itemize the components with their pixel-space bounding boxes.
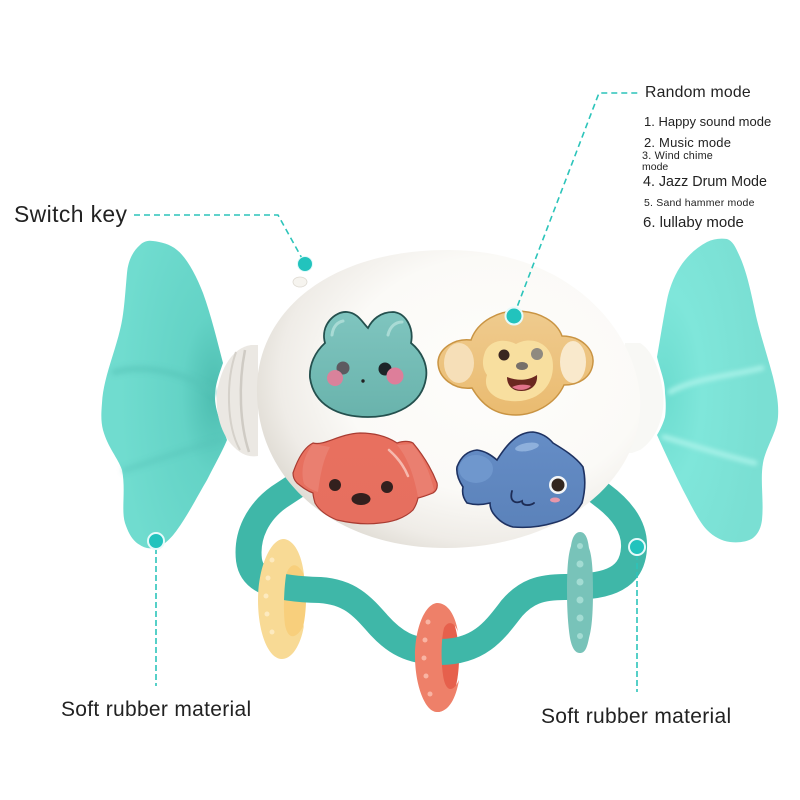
face: rabbit [310, 312, 426, 417]
mode list: 5. Sand hammer mode [644, 197, 755, 209]
mode list: 6. lullaby mode [643, 214, 744, 231]
ring back: yellow [262, 543, 306, 655]
callout: switch key: Switch key [14, 201, 128, 227]
joint: right [625, 343, 664, 453]
face: whale [457, 432, 585, 527]
mode list: 1. Happy sound mode [644, 114, 771, 129]
toy rattle illustration [101, 239, 778, 712]
wing: left [101, 241, 227, 548]
callout: random mode [506, 84, 751, 324]
callout: left soft rubber: Soft rubber material [61, 698, 251, 721]
ring back: coral [417, 604, 459, 712]
face: dog [293, 433, 437, 524]
mode list: 4. Jazz Drum Mode [643, 174, 767, 190]
switch key button [293, 277, 307, 287]
ring front: coral [415, 603, 459, 712]
callout: switch key [14, 201, 312, 272]
callout: left soft rubber [61, 533, 251, 721]
wing: right [657, 239, 778, 542]
callout: right soft rubber: Soft rubber material [541, 705, 731, 728]
callout: right soft rubber [541, 539, 731, 728]
tube handle [249, 470, 634, 652]
mode list: mode [642, 161, 668, 173]
callout: random mode: Random mode [645, 84, 751, 101]
ring front: yellow [258, 539, 304, 659]
body [257, 250, 640, 548]
ring: teal [567, 532, 593, 653]
wing creases [115, 368, 762, 470]
joint: left [217, 345, 258, 456]
mode list: 3. Wind chime [642, 150, 713, 162]
face: monkey [438, 311, 593, 415]
mode list: 2. Music mode [644, 135, 731, 150]
mode list [642, 114, 771, 231]
